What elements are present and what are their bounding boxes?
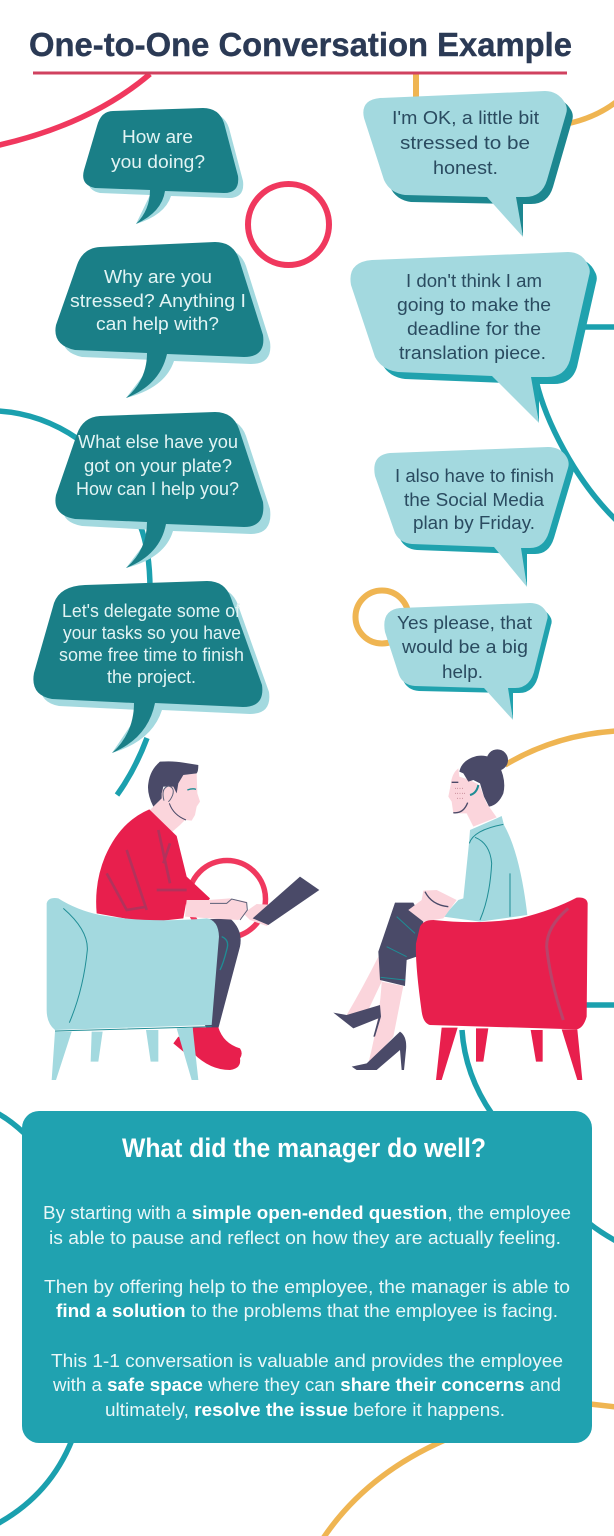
speech bubble: deadline: deadline for the xyxy=(407,319,541,339)
speech bubble: I'm OK: honest. xyxy=(433,158,498,178)
paragraph: find a solution: Then by offering help to the employee, the manager is able to xyxy=(44,1277,570,1297)
speech bubble: Let's delegate: your tasks so you have xyxy=(63,623,241,643)
speech bubble: Yes please xyxy=(384,603,552,720)
panel heading: What did the manager do well? xyxy=(122,1133,486,1163)
paragraph: safe space: This 1-1 conversation is valuable and provides the employee xyxy=(51,1351,563,1371)
paragraph: find a solution xyxy=(44,1277,570,1321)
paragraph: find a solution: find a solution to the problems that the employee is facing. xyxy=(56,1301,558,1321)
speech bubble: Why are you stressed: can help with? xyxy=(96,314,219,334)
speech bubble: Let's delegate: Let's delegate some of xyxy=(62,601,241,621)
speech bubble: What else have you got xyxy=(55,412,270,568)
speech bubble: How are you doing: How are xyxy=(122,127,193,147)
speech bubble: Yes please: would be a big xyxy=(401,637,528,657)
speech bubble: What else have you got: What else have you xyxy=(78,432,238,452)
paragraph: open-ended question: By starting with a simple open-ended question , the employee xyxy=(43,1203,571,1223)
speech bubble: social media plan xyxy=(374,447,574,587)
speech bubble: What else have you got: How can I help you? xyxy=(76,479,239,499)
speech bubble: What else have you got: got on your plate? xyxy=(84,456,232,476)
paragraph: open-ended question xyxy=(43,1203,571,1248)
paragraph: safe space: ultimately, resolve the issue before it happens. xyxy=(105,1400,505,1420)
panel: what did the manager do well xyxy=(22,1111,592,1443)
illustration: employee seated in armchair xyxy=(333,749,588,1080)
illustration: manager seated in armchair xyxy=(47,761,319,1080)
speech bubble: Let's delegate xyxy=(33,581,269,753)
speech bubble: Let's delegate: some free time to finish xyxy=(59,645,244,665)
speech bubble: Why are you stressed: stressed? Anything I xyxy=(70,291,246,311)
speech bubble: How are you doing: you doing? xyxy=(111,152,205,172)
title underline xyxy=(33,72,567,74)
speech bubble: deadline xyxy=(350,252,597,423)
speech bubble: I'm OK: I'm OK, a little bit xyxy=(392,108,539,128)
paragraph: safe space: with a safe space where they can share their concerns and xyxy=(52,1375,561,1395)
paragraph: safe space xyxy=(51,1351,563,1420)
title: One-to-One Conversation Example xyxy=(29,27,572,64)
speech bubble: Why are you stressed: Why are you xyxy=(104,267,212,287)
speech bubble: Yes please: Yes please, that xyxy=(397,613,532,633)
speech bubble: deadline: translation piece. xyxy=(399,343,546,363)
speech bubble: deadline: I don't think I am xyxy=(406,271,542,291)
speech bubble: Let's delegate: the project. xyxy=(107,667,196,687)
speech bubble: I'm OK xyxy=(363,91,573,237)
speech bubble: social media plan: I also have to finish xyxy=(395,466,554,486)
speech bubble: How are you doing xyxy=(83,108,243,224)
speech bubble: deadline: going to make the xyxy=(397,295,551,315)
speech bubble: social media plan: the Social Media xyxy=(404,490,545,510)
speech bubble: I'm OK: stressed to be xyxy=(400,133,530,153)
speech bubble: Why are you stressed xyxy=(55,242,270,398)
speech bubble: Yes please: help. xyxy=(442,662,483,682)
paragraph: open-ended question: is able to pause and reflect on how they are actually feeling. xyxy=(49,1228,561,1248)
speech bubble: social media plan: plan by Friday. xyxy=(413,513,535,533)
